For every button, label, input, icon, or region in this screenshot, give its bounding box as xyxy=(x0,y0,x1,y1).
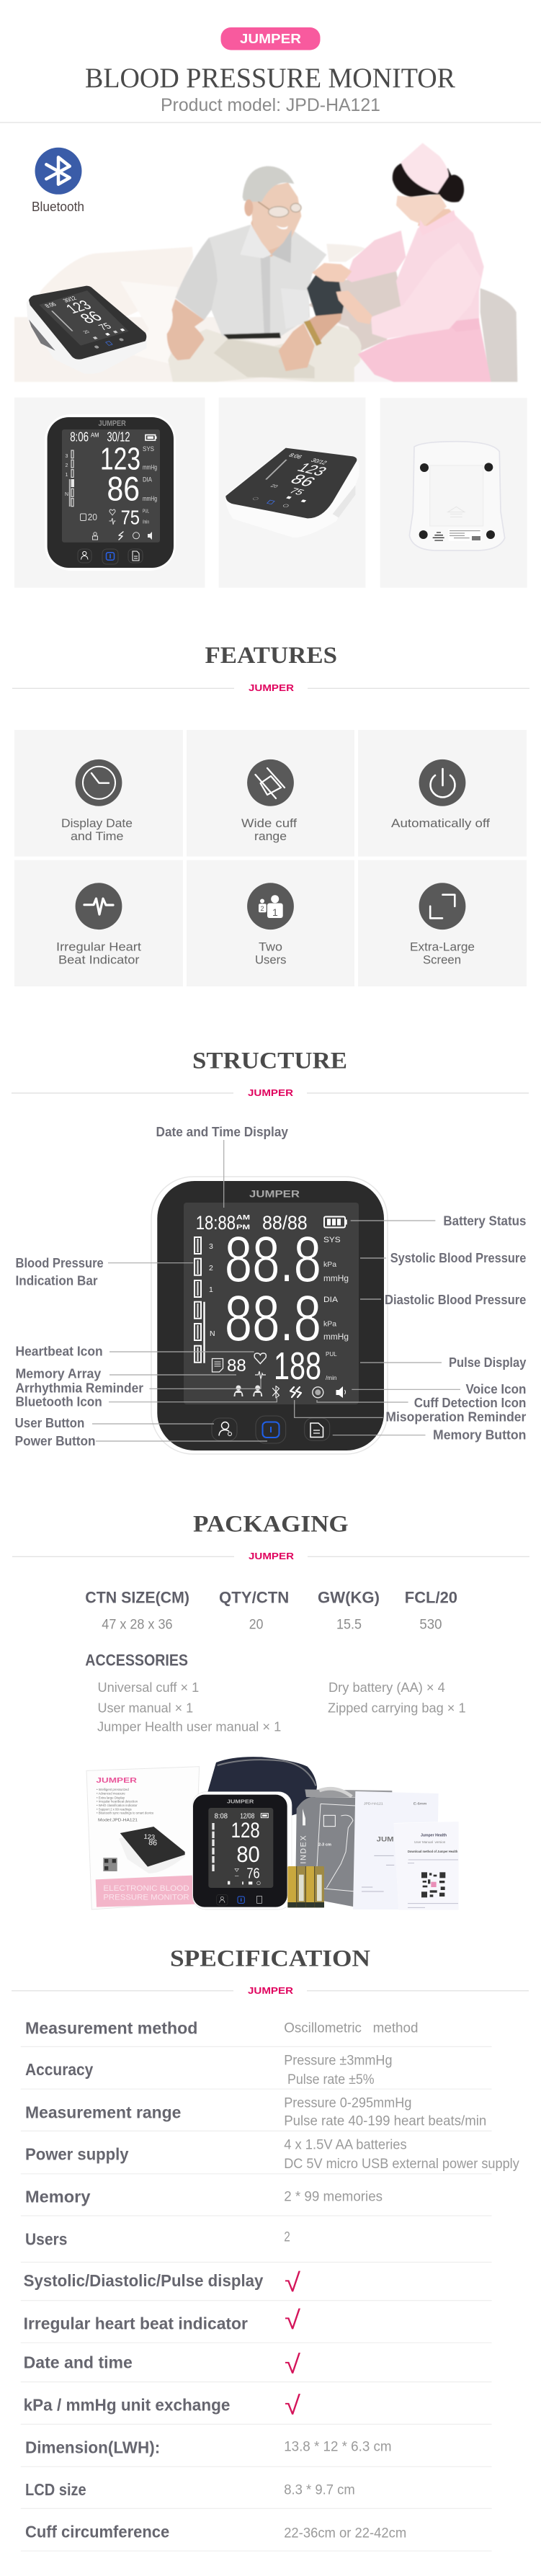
user icons xyxy=(233,1385,262,1396)
row: unit exchange xyxy=(24,2391,300,2420)
row: measurement method: Oscillometric method xyxy=(284,2020,418,2036)
lcd diastolic digits: 88.8 xyxy=(225,1283,321,1355)
bluetooth badge xyxy=(32,148,84,214)
structure labels xyxy=(15,1125,526,1448)
pressure indicator bars: N xyxy=(210,1329,215,1338)
section heading: packaging: JUMPER xyxy=(249,1551,294,1561)
row: memory xyxy=(25,2188,383,2206)
hero photo: nurse measuring patient's blood pressure xyxy=(14,143,517,382)
row: dimension: 13.8 * 12 * 6.3 cm xyxy=(284,2440,392,2454)
packaging table: FCL/20 xyxy=(405,1588,457,1606)
instruction papers: JUM xyxy=(377,1835,394,1842)
row: measurement range xyxy=(25,2095,486,2129)
row: dimension xyxy=(25,2438,392,2456)
monitor front: 20 xyxy=(88,512,97,522)
monitor front: 3 xyxy=(65,454,68,459)
accessories list: ACCESSORIES xyxy=(85,1652,188,1670)
feature: two users: 1 xyxy=(272,906,278,918)
lcd diastolic digits: DIA xyxy=(323,1296,339,1304)
row: accuracy: Pulse rate ±5% xyxy=(287,2072,375,2087)
instruction papers: User Manual version xyxy=(414,1840,446,1844)
row: lcd size: 8.3 * 9.7 cm xyxy=(284,2482,355,2497)
panel: front view xyxy=(14,398,205,588)
accessories list xyxy=(85,1652,466,1734)
lcd pulse digits: 188 xyxy=(274,1345,321,1388)
monitor: 128 xyxy=(231,1819,260,1842)
row: measurement method: Measurement method xyxy=(25,2019,197,2038)
pressure indicator bars: 1 xyxy=(209,1285,213,1294)
retail box: JUMPER xyxy=(96,1777,137,1785)
row: irregular heart beat: Irregular heart beat indicator xyxy=(24,2314,248,2333)
monitor on sofa: 86 xyxy=(76,308,107,327)
feature: display date and time xyxy=(14,730,183,857)
section heading: packaging xyxy=(12,1512,529,1561)
structure labels: Heartbeat Icon xyxy=(16,1344,103,1358)
monitor back xyxy=(409,442,505,551)
structure leader lines xyxy=(92,1140,460,1441)
row: lcd size xyxy=(25,2480,355,2499)
row: memory: 2 * 99 memories xyxy=(284,2189,383,2204)
monitor front: 86 xyxy=(107,469,140,507)
lcd systolic digits: SYS xyxy=(323,1236,341,1244)
row: accuracy: Pressure ±3mmHg xyxy=(284,2054,392,2068)
row: date and time: Date and time xyxy=(24,2353,133,2372)
monitor angled: 75 xyxy=(287,486,306,497)
monitor front: /min xyxy=(143,520,149,525)
monitor front: 123 xyxy=(100,442,140,477)
structure labels: Cuff Detection Icon xyxy=(414,1396,526,1410)
structure diagram: monitor: JUMPER xyxy=(249,1189,300,1200)
structure labels: Misoperation Reminder xyxy=(385,1409,526,1424)
cuff detection icon xyxy=(313,1387,323,1398)
product model: Product model: JPD-HA121 xyxy=(161,95,380,115)
monitor on sofa: 30/12 xyxy=(61,295,78,303)
accessories list: Dry battery (AA) × 4 xyxy=(328,1680,445,1695)
row: power supply: DC 5V micro USB external power supply xyxy=(284,2157,519,2172)
row: accuracy: Accuracy xyxy=(25,2060,93,2079)
row: date and time xyxy=(24,2349,300,2379)
structure labels: Bluetooth Icon xyxy=(16,1395,102,1409)
structure labels: Power Button xyxy=(15,1434,96,1448)
feature: extra-large screen: Screen xyxy=(423,953,461,966)
section heading: structure: JUMPER xyxy=(248,1088,293,1098)
row: lcd size: LCD size xyxy=(25,2480,86,2499)
lcd time and date: PM xyxy=(236,1224,250,1231)
section heading: features: FEATURES xyxy=(205,643,337,669)
row: measurement range: Measurement range xyxy=(25,2103,181,2122)
monitor angled: 8:06 xyxy=(287,453,303,460)
row: power supply: 4 x 1.5V AA batteries xyxy=(284,2137,407,2153)
retail box: PRESSURE MONITOR xyxy=(103,1894,189,1902)
monitor angled: 86 xyxy=(286,471,320,489)
lcd systolic digits: 88.8 xyxy=(225,1224,321,1296)
section heading: specification: JUMPER xyxy=(248,1986,293,1996)
row: accuracy xyxy=(25,2054,392,2087)
panel: angled view xyxy=(219,398,365,588)
battery icon xyxy=(324,1216,347,1228)
monitor angled xyxy=(225,448,359,538)
pressure indicator bars: 2 xyxy=(209,1264,213,1273)
structure labels: Memory Button xyxy=(433,1428,526,1443)
structure labels: Systolic Blood Pressure xyxy=(390,1251,526,1265)
structure labels: Indication Bar xyxy=(16,1273,98,1288)
heart and arrhythmia icons xyxy=(254,1353,266,1379)
lcd time and date: AM xyxy=(236,1214,250,1222)
retail box: ELECTRONIC BLOOD xyxy=(103,1884,189,1893)
row: users xyxy=(25,2229,290,2248)
packaging table: CTN SIZE(CM) xyxy=(85,1588,189,1606)
feature: display date and time: Display Date xyxy=(61,816,133,830)
monitor front: 2 xyxy=(65,463,68,468)
monitor front: 75 xyxy=(121,506,140,528)
accessories list: User manual × 1 xyxy=(98,1701,193,1716)
cuff xyxy=(307,275,344,316)
retail box: Model:JPD-HA121 xyxy=(98,1818,138,1822)
retail box xyxy=(86,1767,200,1909)
retail box: • Intelligent pressurized xyxy=(97,1788,129,1791)
structure labels: Blood Pressure xyxy=(16,1256,104,1270)
monitor angled: 123 xyxy=(293,461,330,478)
monitor front: JUMPER xyxy=(98,419,126,428)
monitor on sofa: 20 xyxy=(81,329,91,335)
monitor xyxy=(192,1792,292,1909)
feature: wide cuff range: range xyxy=(254,829,287,843)
monitor front: 1 xyxy=(65,473,68,478)
feature: two users xyxy=(187,860,354,986)
row: unit exchange: √ xyxy=(285,2391,300,2420)
structure labels: Date and Time Display xyxy=(156,1125,288,1139)
misoperation icon xyxy=(290,1387,301,1397)
pressure indicator bars: 3 xyxy=(209,1242,213,1251)
section heading: specification: SPECIFICATION xyxy=(170,1946,370,1971)
monitor front: 8:06 xyxy=(70,430,89,445)
structure labels: Diastolic Blood Pressure xyxy=(385,1293,526,1307)
brand pill xyxy=(220,27,320,50)
panel: features grid xyxy=(14,730,527,986)
lcd pulse digits: /min xyxy=(326,1375,337,1381)
monitor front: mmHg xyxy=(143,495,157,502)
row: irregular heart beat xyxy=(24,2305,300,2335)
header xyxy=(85,27,456,115)
structure diagram: monitor xyxy=(151,1177,388,1454)
monitor: 76 xyxy=(246,1866,260,1882)
retail box: • Bluetooth sync readings to smart device xyxy=(97,1811,154,1814)
retail box: • Advanced measure xyxy=(97,1792,125,1796)
retail box: 86 xyxy=(148,1838,158,1848)
monitor: JUMPER xyxy=(227,1799,254,1804)
feature: wide cuff range: Wide cuff xyxy=(241,816,297,830)
monitor on sofa xyxy=(27,286,147,374)
sofa and people xyxy=(14,143,517,382)
row: systolic display: Systolic/Diastolic/Pulse display xyxy=(24,2271,264,2290)
row: measurement range: Pulse rate 40-199 heart beats/min xyxy=(284,2113,486,2129)
power button xyxy=(256,1416,286,1443)
monitor: 12/08 xyxy=(240,1812,255,1820)
monitor front: mmHg xyxy=(143,464,157,471)
feature: extra-large screen: Extra-Large xyxy=(410,940,475,953)
monitor angled: 20 xyxy=(269,483,280,489)
lcd diastolic digits: kPa xyxy=(323,1320,336,1329)
memory icon: 88 xyxy=(227,1356,246,1376)
packaging photo xyxy=(86,1757,459,1910)
structure labels: Memory Array xyxy=(16,1367,101,1381)
monitor: 80 xyxy=(236,1842,260,1867)
lcd time and date: 18:88 xyxy=(196,1212,236,1234)
retail box: 123 xyxy=(143,1833,156,1841)
lcd pulse digits: PUL xyxy=(326,1351,337,1358)
row: measurement method xyxy=(25,2019,418,2038)
panel: back view xyxy=(380,398,527,588)
bluetooth badge: Bluetooth xyxy=(32,200,84,214)
section heading: structure: STRUCTURE xyxy=(192,1048,347,1074)
feature: two users: Two xyxy=(259,940,282,953)
retail box: • Support 2 x 99 readings xyxy=(97,1807,132,1811)
packaging table xyxy=(85,1588,457,1632)
user button xyxy=(212,1418,237,1440)
packaging table: 47 x 28 x 36 xyxy=(102,1617,173,1632)
row: systolic display: √ xyxy=(285,2268,300,2297)
accessories list: Zipped carrying bag × 1 xyxy=(328,1701,466,1716)
structure labels: User Button xyxy=(15,1416,84,1430)
lcd diastolic digits: mmHg xyxy=(323,1333,349,1342)
row: cuff circumference xyxy=(25,2522,406,2541)
instruction papers: Jumper Health xyxy=(421,1833,447,1837)
lcd time and date: 88/88 xyxy=(262,1212,308,1234)
monitor on sofa: 123 xyxy=(62,298,95,316)
row: measurement range: Pressure 0-295mmHg xyxy=(284,2095,411,2111)
row: systolic display xyxy=(24,2268,300,2297)
packaging table: 15.5 xyxy=(336,1617,362,1632)
man xyxy=(167,166,362,382)
packaging table: 530 xyxy=(419,1617,442,1632)
row: cuff circumference: 22-36cm or 22-42cm xyxy=(284,2526,406,2541)
cuff: 2-3 cm xyxy=(318,1843,331,1848)
title: BLOOD PRESSURE MONITOR xyxy=(85,62,456,94)
retail box: • Extra large Display xyxy=(97,1796,125,1799)
row: irregular heart beat: √ xyxy=(285,2305,300,2335)
specification table xyxy=(21,2019,519,2551)
row: users: 2 xyxy=(284,2229,290,2245)
packaging table: GW(KG) xyxy=(318,1588,380,1606)
row: dimension: Dimension(LWH): xyxy=(25,2438,160,2456)
feature: automatically off: Automatically off xyxy=(391,816,490,830)
structure labels: Arrhythmia Reminder xyxy=(16,1381,143,1395)
feature: two users: 2 xyxy=(261,905,264,912)
structure labels: Voice Icon xyxy=(465,1382,526,1396)
instruction papers: Download method of Jumper Health xyxy=(408,1850,457,1853)
retail box: • WHO classification indicator xyxy=(97,1804,138,1807)
bluetooth icon xyxy=(272,1386,280,1398)
section heading: structure xyxy=(12,1048,529,1098)
memory button xyxy=(305,1418,330,1440)
packaging table: 20 xyxy=(249,1617,263,1632)
monitor on sofa: 75 xyxy=(97,321,114,332)
section heading: features: JUMPER xyxy=(249,683,294,693)
structure labels: Battery Status xyxy=(443,1213,526,1228)
monitor front: AM xyxy=(91,432,99,439)
memory icon xyxy=(212,1356,246,1376)
lcd systolic digits: kPa xyxy=(323,1260,336,1269)
monitor on sofa: 8:06 xyxy=(43,301,58,309)
instruction papers: JPD-HA121 xyxy=(364,1802,383,1806)
row: memory: Memory xyxy=(25,2188,91,2206)
monitor front: SYS xyxy=(143,445,154,453)
cuff xyxy=(295,1788,392,1907)
monitor front: DIA xyxy=(143,476,152,483)
monitor: 8:08 xyxy=(215,1812,228,1820)
packaging table: QTY/CTN xyxy=(219,1588,289,1606)
lcd systolic digits: mmHg xyxy=(323,1275,349,1283)
section heading: features xyxy=(12,643,529,693)
monitor front: 30/12 xyxy=(107,430,130,445)
row: users: Users xyxy=(25,2229,67,2248)
monitor angled: 30/12 xyxy=(309,458,328,466)
feature: two users: Users xyxy=(255,953,287,966)
instruction papers xyxy=(353,1791,459,1910)
instruction papers: E-6mm xyxy=(413,1802,426,1806)
feature: irregular heart beat indicator: Beat Indicator xyxy=(58,953,140,966)
feature: irregular heart beat indicator: Irregular Heart xyxy=(56,940,141,953)
brand pill: JUMPER xyxy=(240,32,301,46)
cuff: INDEX xyxy=(299,1835,308,1864)
row: cuff circumference: Cuff circumference xyxy=(25,2522,169,2541)
monitor front: PUL xyxy=(143,509,149,514)
feature: wide cuff range xyxy=(187,730,354,857)
lcd time and date xyxy=(196,1212,308,1234)
section heading: specification xyxy=(12,1946,529,1996)
accessories list: Jumper Health user manual × 1 xyxy=(97,1719,281,1734)
batteries xyxy=(287,1866,324,1907)
section heading: packaging: PACKAGING xyxy=(193,1512,349,1538)
nurse xyxy=(312,143,491,382)
row: unit exchange: kPa / mmHg unit exchange xyxy=(24,2395,230,2414)
carrying bag xyxy=(207,1757,317,1816)
monitor front xyxy=(45,414,176,571)
structure labels: Pulse Display xyxy=(449,1355,526,1370)
retail box: • Irregular heartbeat detection xyxy=(97,1799,138,1803)
feature: extra-large screen xyxy=(358,860,527,986)
monitor front: N xyxy=(65,492,68,497)
speaker icon xyxy=(336,1386,346,1398)
accessories list: Universal cuff × 1 xyxy=(98,1680,199,1695)
feature: irregular heart beat indicator xyxy=(14,860,183,986)
row: date and time: √ xyxy=(285,2349,300,2379)
pressure indicator bars xyxy=(195,1237,215,1363)
feature: display date and time: and Time xyxy=(71,829,124,843)
feature: automatically off xyxy=(358,730,527,857)
row: power supply: Power supply xyxy=(25,2144,129,2163)
row: power supply xyxy=(25,2137,519,2172)
